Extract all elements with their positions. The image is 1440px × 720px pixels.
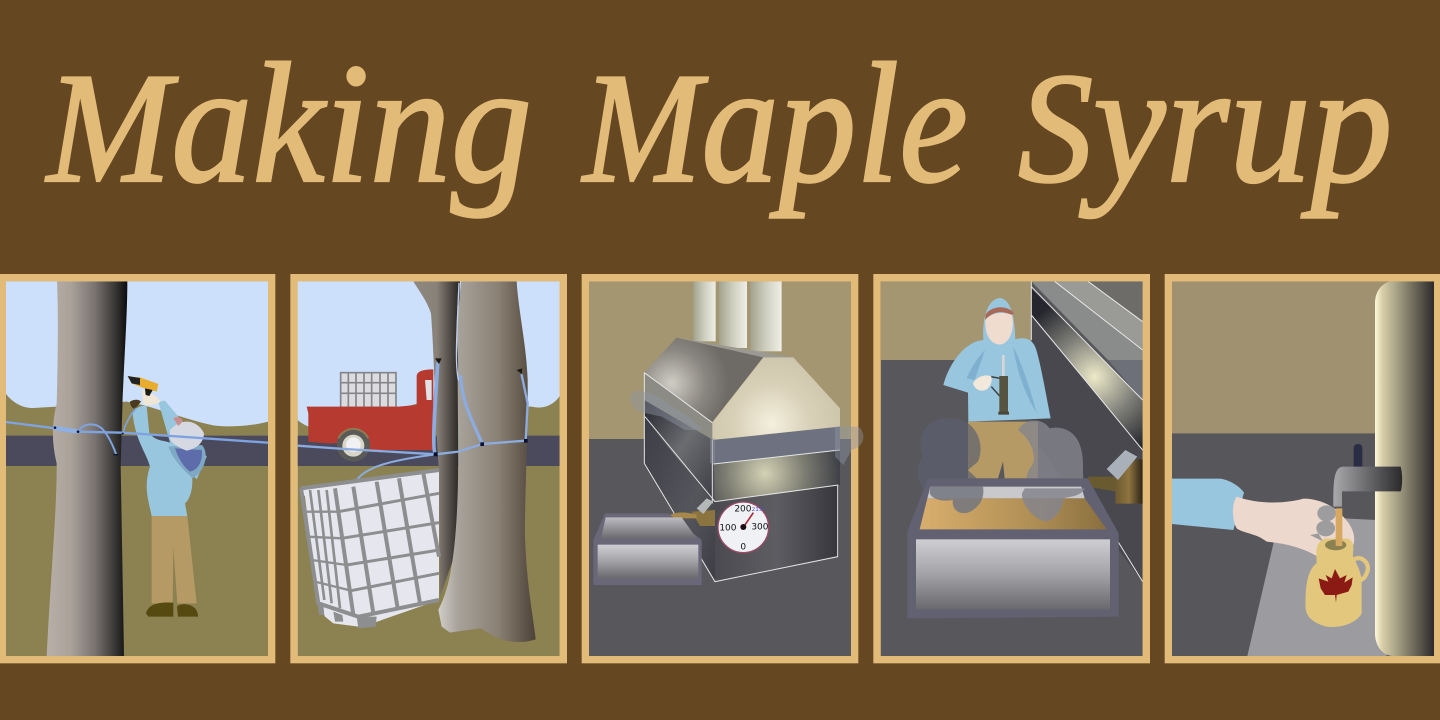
truck: [307, 369, 433, 462]
receiving pan: [593, 513, 702, 585]
panel: drilling the tap hole: [0, 274, 275, 663]
hand: [1233, 497, 1354, 556]
title: Syrup: [1018, 29, 1393, 219]
steam over pan: [930, 487, 1085, 521]
thermometer gauge: 200: [734, 505, 752, 515]
evaporator body: [644, 338, 840, 582]
worker: [128, 376, 207, 617]
thermometer gauge: 0: [740, 542, 746, 552]
maple leaf: [1319, 569, 1353, 603]
syrup stream: [1336, 508, 1342, 546]
spigot: [1088, 450, 1143, 504]
sleeve: [1172, 479, 1244, 530]
drill: [128, 376, 158, 396]
tree trunk: [47, 281, 127, 656]
panel: bottling the syrup: [1165, 274, 1440, 663]
chimneys: [693, 281, 782, 351]
syrup jug: [1306, 539, 1368, 627]
spigot: [670, 498, 715, 526]
back tree: [413, 281, 460, 597]
finishing pan: [907, 478, 1119, 618]
thermometer gauge: 219°: [752, 507, 765, 513]
spiles: [435, 358, 522, 374]
title: [45, 29, 1393, 219]
thermometer gauge: [718, 502, 769, 553]
tank: [1375, 281, 1434, 656]
hydrometer: [998, 355, 1009, 415]
spout and valve handle: [1333, 444, 1402, 507]
sap lines: [6, 408, 268, 454]
title: Maple: [581, 29, 968, 219]
steam: [918, 418, 1084, 489]
panel: evaporator with thermometer: [582, 274, 863, 663]
counter: [1247, 518, 1387, 656]
thermometer gauge: 300: [751, 522, 769, 532]
evaporator side: [1031, 281, 1143, 582]
sap tubes: [298, 283, 528, 482]
IBC tote: [301, 470, 439, 628]
panel: checking syrup with hydrometer: [873, 274, 1150, 663]
front tree: [438, 281, 536, 642]
panel: truck, tubing and collection tank: [290, 274, 567, 663]
thermometer gauge: 100: [719, 524, 737, 534]
steam: [630, 391, 863, 465]
syrup maker: [943, 298, 1051, 478]
title: Making: [45, 29, 532, 219]
